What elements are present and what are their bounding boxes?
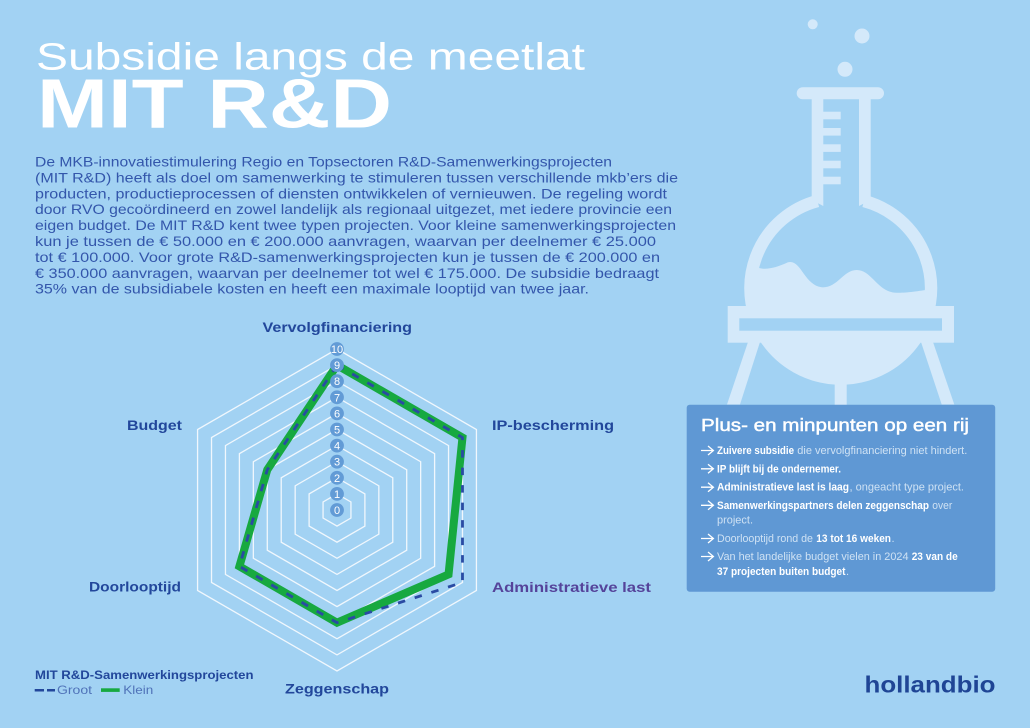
- intro text block: De MKB-innovatiestimulering Regio en Topsectoren R&D-Samenwerkingsprojecten: [35, 154, 612, 170]
- axis labels: [89, 320, 651, 698]
- intro text block: tot € 100.000. Voor grote R&D-samenwerkingsprojecten kun je tussen de € 200.000 en: [35, 249, 660, 265]
- title: main: MIT R&D: [37, 64, 392, 142]
- axis scale badges: 7: [334, 392, 340, 404]
- pros and cons list: over: [932, 500, 953, 512]
- panel heading: Plus- en minpunten op een rij: [701, 415, 969, 435]
- legend: Klein: [123, 683, 153, 697]
- title: subtitle: Subsidie langs de meetlat: [36, 36, 586, 78]
- pros and cons list: , ongeacht type project.: [850, 482, 964, 494]
- axis labels: Budget: [127, 418, 182, 434]
- pros and cons list: IP blijft bij de ondernemer.: [717, 463, 841, 475]
- pros and cons list: 23 van de: [912, 551, 958, 563]
- legend: [35, 668, 254, 697]
- axis scale badges: 1: [334, 489, 340, 501]
- intro text block: 35% van de subsidiabele kosten en heeft een maximale looptijd van twee jaar.: [35, 281, 589, 297]
- axis scale badges: 6: [334, 408, 340, 420]
- radar chart: [89, 320, 651, 698]
- axis scale badges: [330, 342, 344, 517]
- axis scale badges: 0: [334, 505, 340, 517]
- axis scale badges: 4: [334, 441, 340, 453]
- pros and cons list: project.: [717, 515, 753, 527]
- axis scale badges: 8: [334, 376, 340, 388]
- pros and cons list: .: [892, 533, 895, 545]
- pros and cons list: Doorlooptijd rond de: [717, 533, 813, 545]
- arrows: [701, 446, 713, 561]
- pros and cons list: 37 projecten buiten budget: [717, 566, 846, 578]
- axis scale badges: 5: [334, 424, 340, 436]
- pros and cons list: Administratieve last is laag: [717, 482, 849, 494]
- axis scale badges: 9: [334, 360, 340, 372]
- axis labels: Doorlooptijd: [89, 580, 181, 596]
- intro text block: (MIT R&D) heeft als doel om samenwerking te stimuleren tussen verschillende mkb’ers die: [35, 169, 678, 185]
- pros and cons list: die vervolgfinanciering niet hindert.: [797, 445, 967, 457]
- intro text block: € 350.000 aanvragen, waarvan per deelnemer tot wel € 175.000. De subsidie bedraagt: [35, 265, 659, 281]
- pros and cons list: Van het landelijke budget vielen in 2024: [717, 551, 908, 563]
- axis scale badges: 2: [334, 473, 340, 485]
- intro text block: door RVO gecoördineerd en zowel landelijk als regionaal uitgezet, met iedere provincie een: [35, 201, 672, 217]
- legend: MIT R&D-Samenwerkingsprojecten: [35, 668, 254, 682]
- intro text block: kun je tussen de € 50.000 en € 200.000 aanvragen, waarvan per deelnemer € 25.000: [35, 233, 656, 249]
- axis scale badges: 10: [331, 344, 343, 356]
- pros and cons list: [717, 445, 967, 578]
- legend: Groot: [57, 683, 93, 697]
- data series: Groot: [239, 365, 462, 623]
- pros and cons list: 13 tot 16 weken: [816, 533, 891, 545]
- axis labels: IP-bescherming: [492, 418, 614, 434]
- data series: Klein: [239, 365, 462, 623]
- pros and cons list: .: [846, 566, 849, 578]
- panel: plus- en minpunten: [687, 405, 995, 592]
- pros and cons list: Zuivere subsidie: [717, 445, 794, 457]
- icon: flask illustration: [727, 19, 954, 405]
- pros and cons list: Samenwerkingspartners delen zeggenschap: [717, 500, 929, 512]
- axis labels: Vervolgfinanciering: [262, 320, 412, 336]
- intro text block: [35, 154, 678, 297]
- axis labels: Administratieve last: [492, 580, 651, 596]
- axis labels: Zeggenschap: [285, 682, 389, 698]
- axis scale badges: 3: [334, 457, 340, 469]
- intro text block: eigen budget. De MIT R&D kent twee typen projecten. Voor kleine samenwerkingsprojecten: [35, 217, 676, 233]
- logo: hollandbio: hollandbio: [864, 671, 996, 697]
- intro text block: producten, productieprocessen of diensten ontwikkelen of vernieuwen. De regeling wordt: [35, 185, 667, 201]
- radar grid: [198, 349, 476, 671]
